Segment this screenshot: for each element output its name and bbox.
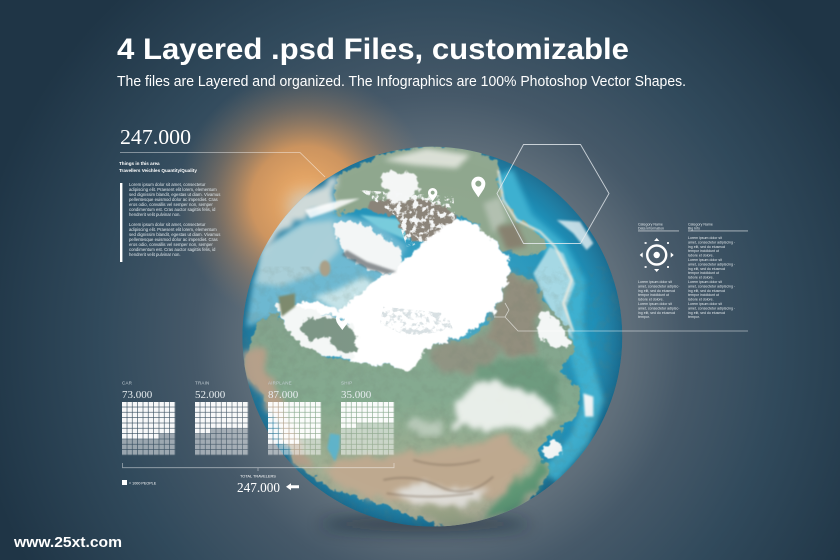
chart: train 52.000: 52.000	[195, 389, 226, 401]
pacific cloud south	[583, 393, 593, 417]
column two heading: Big Info	[688, 226, 700, 230]
panel: left text block	[119, 125, 325, 262]
column one heading: Category Name	[638, 222, 663, 226]
body paragraph one: pellentesque euismod dolor ac imperdiet. Cras	[129, 197, 218, 202]
column two text: tempor.	[688, 315, 700, 319]
iceland	[320, 260, 330, 276]
column one rule	[638, 230, 679, 232]
column two text: ing elit, sed do eiusmod	[688, 289, 725, 293]
large cloud	[453, 382, 557, 430]
caspian sea	[327, 433, 340, 462]
column two text: ing elit, sed do eiusmod	[688, 245, 725, 249]
column two text: ing elit, sed do eiusmod	[688, 267, 725, 271]
column one text: amet, consectetur adipisc-	[638, 284, 680, 288]
column two text: tempor incididunt ut	[688, 293, 719, 297]
south east asia forest	[480, 460, 547, 520]
column two text: amet, consectetur adipiscing -	[688, 306, 736, 310]
icon: compass target	[640, 238, 674, 272]
small hexagon and leader line	[494, 303, 748, 331]
hexagon callout	[497, 144, 609, 244]
timeline bracket	[122, 463, 394, 471]
alaska haze	[483, 197, 507, 233]
pin: north america	[471, 177, 485, 197]
column one heading: Data information	[638, 226, 664, 230]
bering shallow ice	[533, 247, 575, 340]
hudson pale water	[360, 215, 407, 240]
greenland	[330, 220, 403, 274]
chart: train 52.000	[195, 380, 248, 455]
column two text: tempor incididunt ut	[688, 271, 719, 275]
column one text: ing elit, sed do eiusmod	[638, 289, 675, 293]
column one text: tempor incididunt ut	[638, 293, 669, 297]
body paragraph one: sed dignissim blandit, egestas ut diam. Vivamus	[129, 192, 220, 197]
column two text: labore et dolore.	[688, 276, 714, 280]
chart: airplane 87.000: 87.000	[268, 389, 299, 401]
headline number: 247.000	[120, 125, 191, 149]
icon: left arrow	[286, 483, 299, 490]
japan sea ice	[538, 310, 573, 460]
column two text: tempor incididunt ut	[688, 249, 719, 253]
column two text: amet, consectetur adipiscing -	[688, 262, 736, 266]
north america cloud haze	[383, 148, 470, 168]
total travelers: TOTAL TRAVELERS	[240, 474, 276, 478]
orange sun glow	[170, 70, 440, 330]
body paragraph one: eros odio, convallis vel semper non, semper	[129, 202, 213, 207]
column two text: Lorem ipsum dolor sit	[688, 280, 722, 284]
body paragraph two: adipiscing elit. Praesent elit lorem, elementum	[129, 227, 217, 232]
globe shadow	[320, 516, 530, 532]
baffin white islands	[380, 172, 418, 205]
legend	[122, 480, 157, 485]
pin: arctic	[428, 188, 437, 201]
column two text: ing elit, sed do eiusmod	[688, 311, 725, 315]
pacific cloud	[557, 220, 593, 250]
total travelers	[237, 474, 299, 495]
column one text: amet, consectetur adipisc-	[638, 306, 680, 310]
chart: car 73.000	[122, 380, 175, 455]
body paragraph two: Lorem ipsum dolor sit amet, consectetur	[129, 222, 205, 227]
column two text: labore et dolore.	[688, 298, 714, 302]
mountain ridges	[383, 460, 493, 497]
block heading: Travellers Veichles Quantity/Quality	[119, 168, 197, 173]
column two text: Lorem ipsum dolor sit	[688, 236, 722, 240]
column two rule	[688, 230, 748, 232]
island snow speckle	[360, 190, 457, 247]
faint cloud	[407, 419, 447, 434]
chart: car 73.000: 73.000	[122, 389, 153, 401]
main polar ice	[290, 217, 510, 372]
column two text: Lorem ipsum dolor sit	[688, 302, 722, 306]
column two text: labore et dolore.	[688, 254, 714, 258]
chart: train 52.000: TRAIN	[195, 380, 210, 386]
column one text: Lorem ipsum dolor sit	[638, 280, 672, 284]
body paragraph one: condimentum est. Cras auctor sagittis felis, id	[129, 207, 216, 212]
chart: airplane 87.000: AIRPLANE	[268, 380, 292, 386]
chart: car 73.000: CAR	[122, 380, 133, 386]
leader line	[120, 152, 325, 177]
india tan	[413, 508, 480, 527]
ocean	[242, 147, 622, 527]
central siberia tone	[427, 340, 503, 373]
pin: europe	[336, 312, 349, 330]
chart: ship 35.000: SHIP	[341, 380, 352, 386]
column one text: ing elit, sed do eiusmod	[638, 311, 675, 315]
globe	[240, 145, 623, 532]
sphere shading	[242, 147, 622, 527]
top left cloud bank	[263, 177, 340, 250]
body paragraph two: condimentum est. Cras auctor sagittis felis, id	[129, 247, 216, 252]
greenland coast shadow	[342, 250, 397, 274]
siberia tan highland	[487, 273, 545, 357]
body paragraph one: adipiscing elit. Praesent elit lorem, elementum	[129, 187, 217, 192]
total travelers: 247.000	[237, 480, 280, 495]
column one text: Lorem ipsum dolor sit	[638, 302, 672, 306]
norway land	[278, 293, 295, 317]
panel: right text block	[638, 222, 748, 319]
alaska white coast	[498, 170, 573, 332]
body paragraph two: pellentesque euismod dolor ac imperdiet. Cras	[129, 237, 218, 242]
body paragraph two: eros odio, convallis vel semper non, semper	[129, 242, 213, 247]
body paragraph one: hendrerit velit pulvinar non.	[129, 212, 181, 217]
green lowland	[473, 357, 560, 417]
pale sea ice water	[313, 277, 380, 313]
canadian arctic islands	[367, 197, 457, 243]
north america	[333, 145, 552, 255]
north european coastal ice	[273, 300, 357, 360]
watermark: www.25xt.com	[13, 534, 122, 551]
body paragraph one: Lorem ipsum dolor sit amet, consectetur	[129, 182, 205, 187]
scandinavia	[302, 318, 358, 353]
terrain texture	[240, 267, 623, 527]
column one text: tempor.	[638, 315, 650, 319]
vertical accent bar	[120, 183, 122, 262]
steppe sand	[323, 433, 530, 503]
chart: ship 35.000: 35.000	[341, 389, 372, 401]
arctic shallow water	[247, 210, 407, 327]
ice edge fragments	[380, 307, 453, 337]
column two text: amet, consectetur adipiscing -	[688, 284, 736, 288]
himalaya snow	[390, 483, 490, 507]
column two text: amet, consectetur adipiscing -	[688, 240, 736, 244]
alaska tan	[497, 223, 527, 250]
western europe tan	[243, 347, 312, 468]
body paragraph two: sed dignissim blandit, egestas ut diam. Vivamus	[129, 232, 220, 237]
chart: airplane 87.000	[268, 380, 321, 455]
column one text: labore et dolore.	[638, 298, 664, 302]
body paragraph two: hendrerit velit pulvinar non.	[129, 252, 181, 257]
column two heading: Category Name	[688, 222, 713, 226]
coastal shallow water	[503, 173, 593, 477]
block heading: Things in this area	[119, 161, 160, 166]
chart: ship 35.000	[341, 380, 394, 455]
legend: = 1000 PEOPLE	[129, 481, 157, 485]
column two text: Lorem ipsum dolor sit	[688, 258, 722, 262]
subtitle: The files are Layered and organized. The Infographics are 100% Photoshop Vector Shapes.	[117, 74, 686, 90]
outer cloud on globe edge	[288, 190, 330, 240]
left pale haze	[257, 220, 340, 287]
title: 4 Layered .psd Files, customizable	[117, 33, 629, 66]
eurasia	[242, 272, 580, 532]
atlantic white swirl	[305, 198, 360, 218]
